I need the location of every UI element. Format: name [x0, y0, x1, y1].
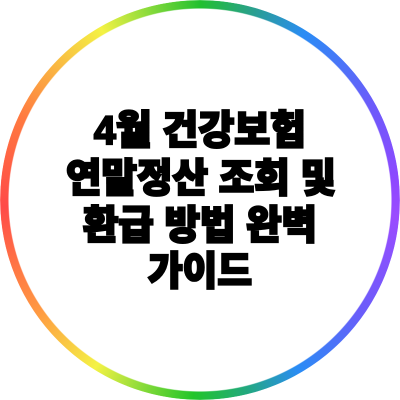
title: 환급 방법 완벽	[83, 204, 317, 248]
title: 가이드	[148, 250, 252, 294]
title: 연말정산 조회 및	[66, 157, 336, 201]
title: 4월 건강보험	[94, 109, 306, 153]
